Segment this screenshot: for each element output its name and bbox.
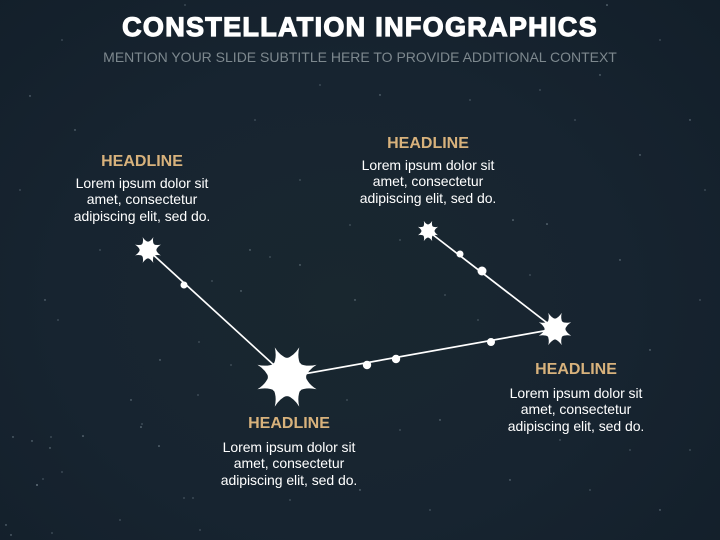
text block: bottom <box>221 415 357 488</box>
text block: top: HEADLINE <box>387 135 469 152</box>
subtitle: MENTION YOUR SLIDE SUBTITLE HERE TO PROVIDE ADDITIONAL CONTEXT <box>103 49 617 65</box>
title: CONSTELLATION INFOGRAPHICS <box>122 12 598 42</box>
connecting lines <box>148 231 555 377</box>
star: large <box>254 344 320 410</box>
text block: left: HEADLINE <box>101 153 183 170</box>
text block: top: adipiscing elit, sed do. <box>360 190 496 206</box>
text block: bottom: Lorem ipsum dolor sit <box>223 439 355 455</box>
star: left <box>134 236 162 264</box>
text block: left: amet, consectetur <box>87 191 197 207</box>
star: right <box>537 311 573 347</box>
text block: top: Lorem ipsum dolor sit <box>362 157 494 173</box>
text block: left <box>74 153 210 224</box>
text block: right: amet, consectetur <box>521 401 631 417</box>
text block: top <box>360 135 496 206</box>
star: top <box>417 220 439 242</box>
text block: top: amet, consectetur <box>373 173 483 189</box>
text block: right: HEADLINE <box>535 361 617 378</box>
text block: bottom: adipiscing elit, sed do. <box>221 472 357 488</box>
text block: right: adipiscing elit, sed do. <box>508 418 644 434</box>
text block: right <box>508 361 644 434</box>
text block: right: Lorem ipsum dolor sit <box>510 385 642 401</box>
text block: left: Lorem ipsum dolor sit <box>76 175 208 191</box>
text block: left: adipiscing elit, sed do. <box>74 208 210 224</box>
small node dots <box>180 250 495 369</box>
text block: bottom: amet, consectetur <box>234 455 344 471</box>
text block: bottom: HEADLINE <box>248 415 330 432</box>
